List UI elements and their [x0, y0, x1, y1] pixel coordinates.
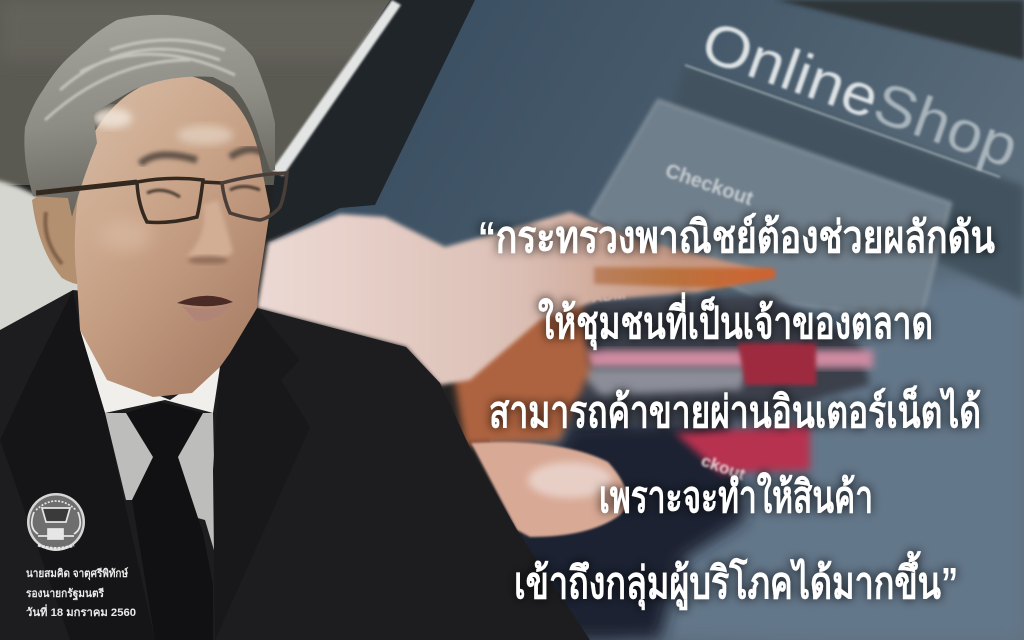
lapel right: [213, 308, 310, 640]
person: suit jacket: [0, 290, 590, 640]
nose: [187, 200, 233, 263]
lapel left: [0, 290, 155, 640]
person: ear: [32, 194, 82, 285]
shirt: [105, 413, 216, 557]
background photo: tablet body: [268, 0, 1024, 640]
person: glasses: [36, 173, 287, 222]
background photo: office wall: [0, 0, 420, 352]
quote line 4: เพราะจะทำให้สินค้า: [599, 471, 873, 522]
background photo: pointing hand: ADM: [591, 285, 626, 306]
person: hair: [24, 15, 275, 217]
eyes: [147, 186, 260, 197]
speaker position: รองนายกรัฐมนตรี: [26, 587, 104, 601]
speaker name: นายสมคิด จาตุศรีพิทักษ์: [26, 567, 129, 581]
screen label: OnlineShop: OnlineShop: [694, 9, 1024, 180]
background photo: pointing hand: ckout: [699, 451, 748, 484]
tie: [126, 402, 213, 640]
background photo: pointing hand: [257, 212, 873, 640]
mouth: [177, 296, 233, 306]
date: วันที่ 18 มกราคม 2560: [26, 604, 136, 619]
person: face: [75, 76, 270, 397]
background photo: online shop screen card: Checkout: [662, 160, 756, 211]
background photo: online shop screen card: [590, 65, 1024, 320]
shirt collar: [80, 330, 220, 413]
eyebrows: [140, 149, 263, 164]
quote text: [478, 212, 995, 611]
seal emblem: [32, 501, 80, 548]
government seal: [27, 493, 85, 551]
speaker caption: [26, 567, 136, 619]
